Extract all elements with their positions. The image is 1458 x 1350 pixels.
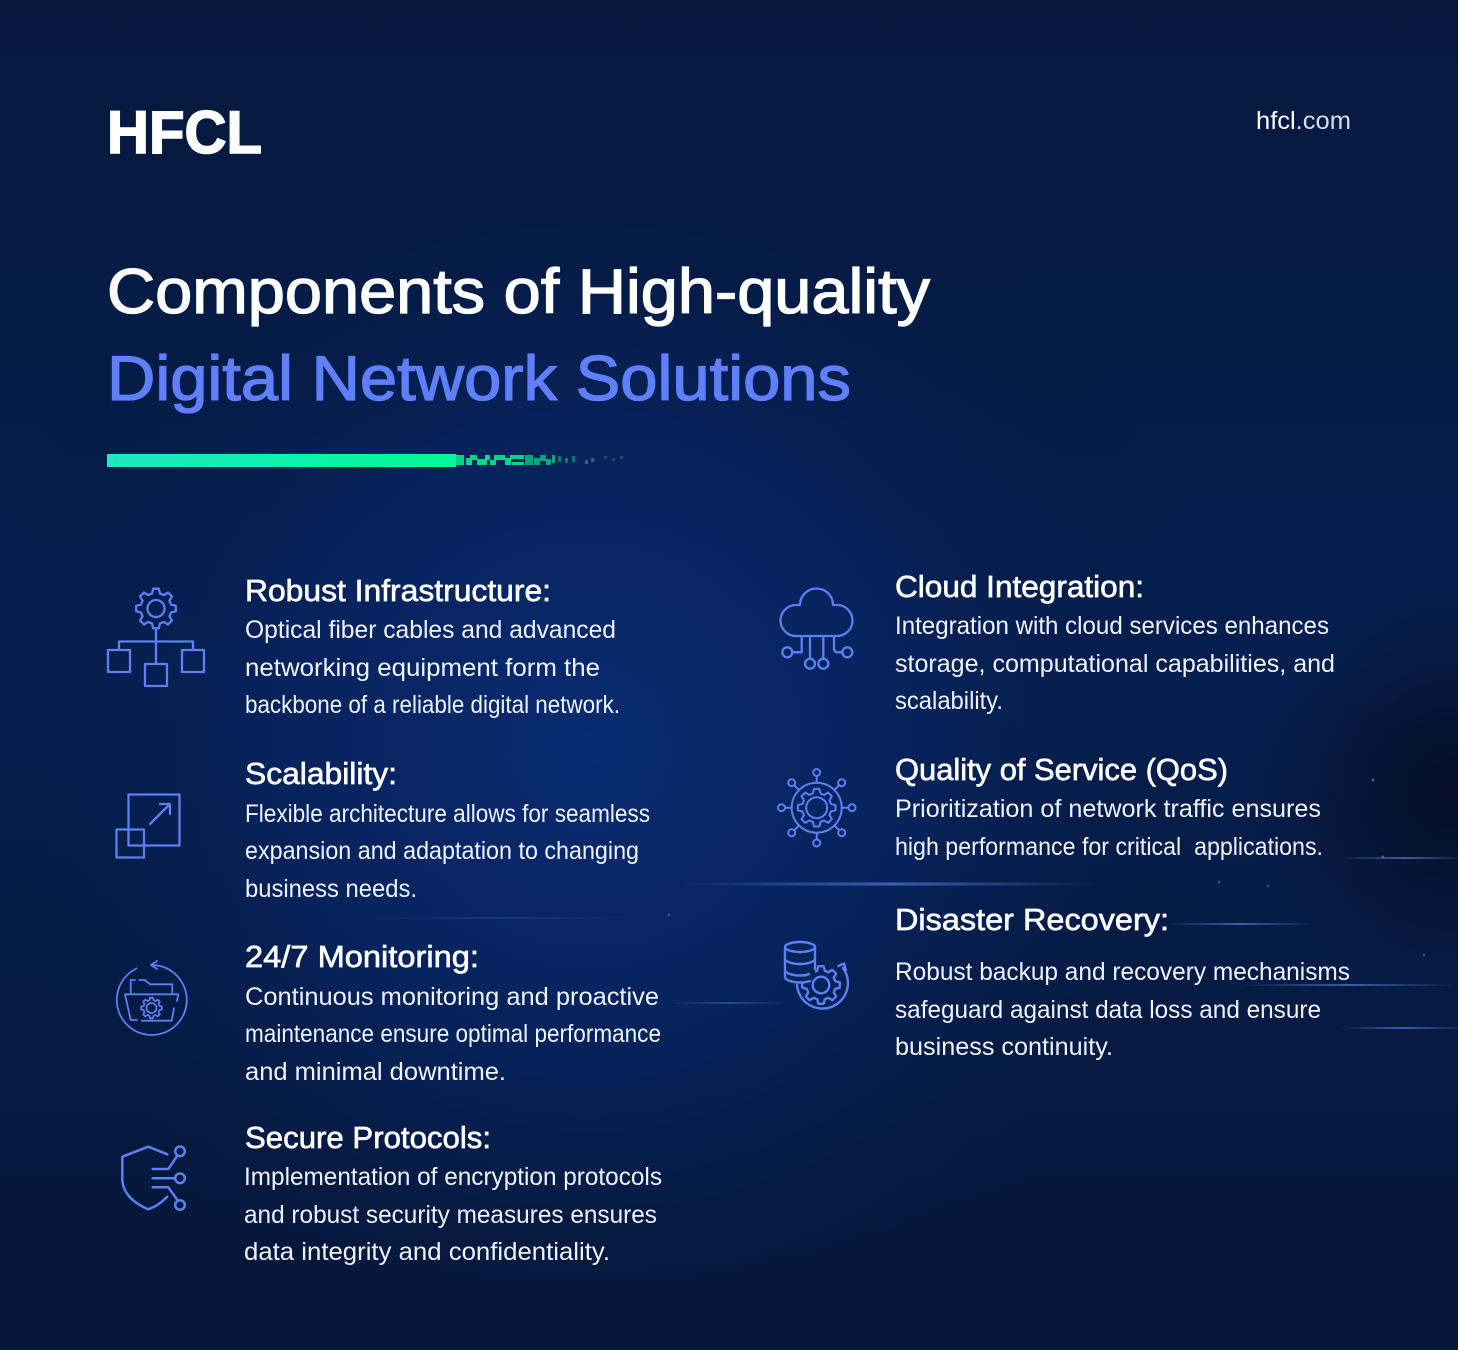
item: Cloud Integration [780,569,1335,715]
icon: folder with gear and refresh circle [117,961,187,1035]
body text: expansion and adaptation to changing [245,837,639,865]
body text: networking equipment form the [245,654,600,682]
title: Components of High-quality [107,257,931,327]
body text: and robust security measures ensures [244,1201,657,1229]
heading: Quality of Service (QoS) [895,752,1228,787]
body text: storage, computational capabilities, and [895,650,1335,678]
icon: gear hub with nodes [778,769,856,846]
body text [895,958,1350,1061]
item: 24/7 Monitoring [117,939,661,1086]
heading: Cloud Integration: [895,569,1144,604]
body text: Continuous monitoring and proactive [245,983,659,1011]
body text: high performance for critical applications. [895,833,1323,861]
heading: Robust Infrastructure: [245,573,551,608]
title [107,257,931,414]
item: Disaster Recovery [785,902,1350,1061]
heading: Disaster Recovery: [895,902,1169,937]
body text: Integration with cloud services enhances [895,612,1329,640]
body text: scalability. [895,687,1003,715]
icon: gear org chart [108,589,204,686]
website link: hfcl.com [1256,107,1351,135]
item: Robust Infrastructure [108,573,620,719]
body text: business continuity. [895,1033,1113,1061]
body text [895,795,1323,861]
item: Secure Protocols [122,1120,662,1266]
heading: Secure Protocols: [245,1120,491,1155]
body text: maintenance ensure optimal performance [245,1020,661,1048]
icon: cloud with connectors [780,588,852,669]
body text [245,800,650,903]
logo: HFCL: HFCL [107,99,262,166]
body text [245,983,661,1086]
accent bar with pixel fade [107,454,623,467]
body text: business needs. [245,875,417,903]
body text: Optical fiber cables and advanced [245,616,616,644]
heading: Scalability: [245,756,397,791]
body text: Robust backup and recovery mechanisms [895,958,1350,986]
heading: 24/7 Monitoring: [245,939,479,974]
body text: Flexible architecture allows for seamless [245,800,650,828]
body text: data integrity and confidentiality. [244,1238,610,1266]
title highlight line: Digital Network Solutions [107,344,851,414]
body text: Prioritization of network traffic ensures [895,795,1321,823]
icon: database with gear and recovery arrow [785,942,848,1009]
body text [895,612,1335,715]
body text [244,1163,662,1266]
icon: expand squares [116,794,180,858]
item: Quality of Service [778,752,1323,861]
body text: and minimal downtime. [245,1058,506,1086]
body text: backbone of a reliable digital network. [245,691,620,719]
body text: safeguard against data loss and ensure [895,996,1321,1024]
body text [245,616,620,719]
icon: shield with circuit nodes [122,1146,185,1210]
item: Scalability [116,756,650,903]
body text: Implementation of encryption protocols [244,1163,662,1191]
